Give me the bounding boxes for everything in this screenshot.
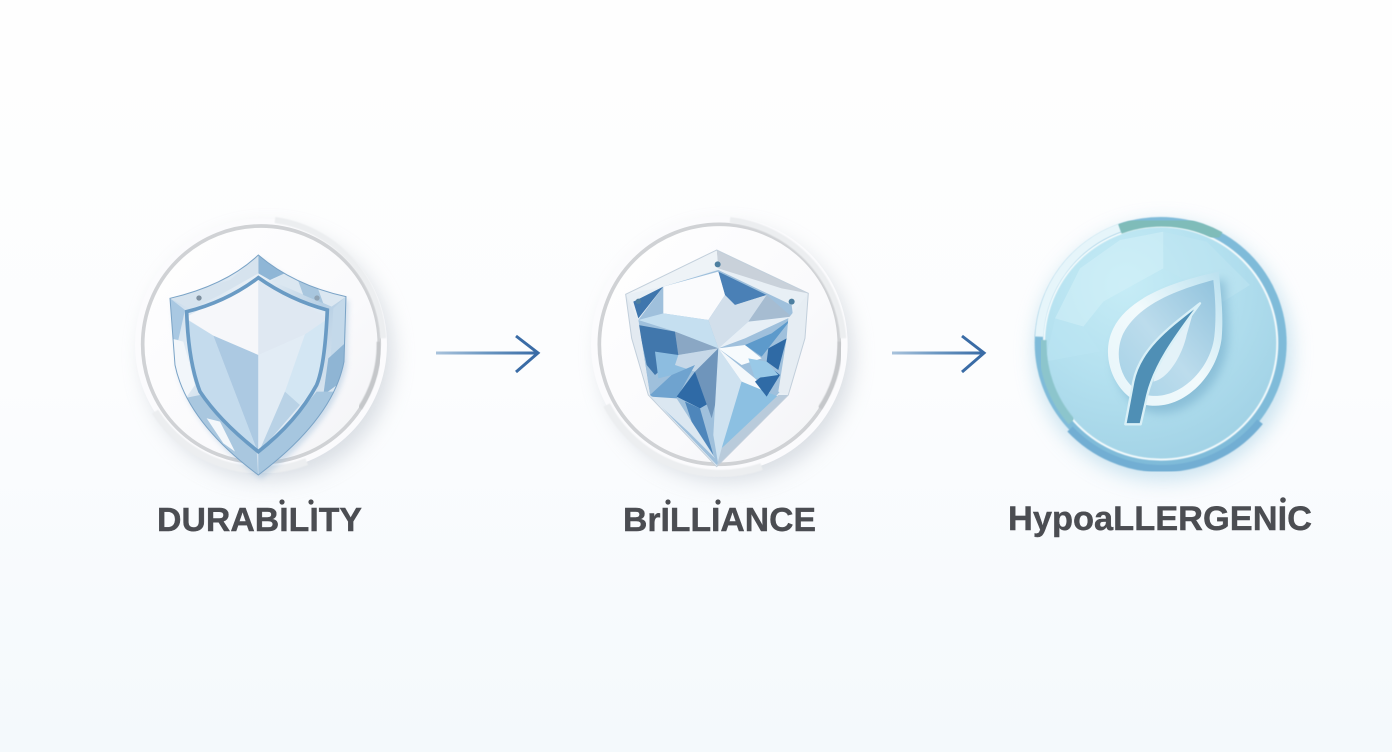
arrow: durability to brilliance xyxy=(436,336,538,372)
panel: durability xyxy=(135,218,393,538)
panel: hypoallergenic xyxy=(1008,217,1312,538)
icon: shield in ring xyxy=(135,218,393,480)
icon: leaf disc xyxy=(1035,217,1292,480)
arrow: brilliance to hypoallergenic xyxy=(892,336,984,372)
panel: brilliance xyxy=(591,216,853,538)
label: hypoallergenic: HypoaLLERGENIC xyxy=(1008,500,1312,538)
label: brilliance: BrILLIANCE xyxy=(623,501,816,538)
icon: diamond shield in ring xyxy=(591,216,853,482)
label: durability: DURABILITY xyxy=(157,501,362,538)
